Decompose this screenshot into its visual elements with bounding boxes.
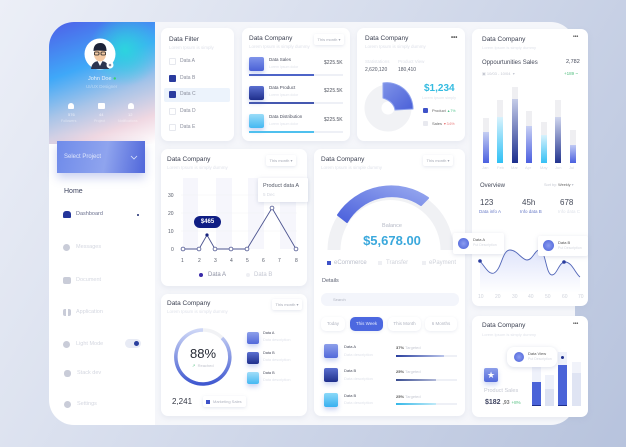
pie chart: [364, 82, 414, 132]
month labels: Jul: [569, 165, 574, 170]
panel: data company list: Data Distribution: [269, 114, 302, 119]
callout: data A: Data A: [473, 237, 485, 242]
panel: line chart card: This month ▾: [270, 158, 292, 163]
panel: pie card: Sales ▼3.6%: [432, 121, 455, 126]
tab: this month: [388, 317, 421, 331]
line chart: 5: [246, 258, 249, 264]
panel: data company list: [242, 28, 350, 141]
nav: application icon: [63, 309, 71, 316]
panel: pie card: Product View: [398, 59, 424, 64]
line chart: 2: [198, 258, 201, 264]
panel: pie card: Lorem Ipsum simply: [422, 96, 456, 100]
panel: progress ring card: Data description: [263, 338, 290, 342]
panel: progress ring card: Data description: [263, 378, 290, 382]
tab: today: Today: [327, 321, 339, 326]
panel: progress ring card: Data A: [263, 331, 274, 335]
panel: balance and details: Transfer: [386, 260, 408, 266]
stat values: [68, 112, 132, 117]
line chart: 6: [262, 258, 265, 264]
panel: data filter: Data D: [180, 108, 196, 114]
icon: star: ★: [487, 370, 495, 380]
search: Search: [333, 297, 346, 302]
callout: product data: 5 Dec: [263, 192, 275, 197]
role: UI/UX Designer: [86, 84, 117, 89]
month labels: Feb: [497, 165, 504, 170]
panel: balance and details: This month ▾: [427, 158, 449, 163]
panel: opportunities and overview: Lorem Ipsum is simply dummy: [482, 45, 536, 50]
panel: pie card: 180,410: [398, 67, 416, 73]
tab: this month: This Month: [393, 321, 416, 326]
panel: balance and details: 25% Targeted: [396, 369, 421, 374]
panel: line chart card: Lorem Ipsum is simply dummy: [167, 165, 228, 170]
panel: product sales: $182 ,93 +8%: [485, 399, 521, 406]
panel: opportunities and overview: 2,782: [566, 59, 580, 65]
month labels: Jan: [482, 165, 488, 170]
panel: data filter: Data A: [180, 58, 195, 64]
panel: opportunities and overview: •••: [573, 34, 578, 40]
line chart: 8: [295, 258, 298, 264]
stat: person icon: [68, 103, 74, 109]
panel: opportunities and overview: 45h: [522, 198, 535, 207]
nav: messages label: Messages: [76, 244, 101, 250]
month labels: Jun: [555, 165, 561, 170]
axis labels: 60: [562, 294, 568, 300]
panel: opportunities and overview: 678: [560, 198, 573, 207]
panel: balance and details: Details: [322, 278, 339, 284]
reached label: ↗ Reached: [192, 363, 214, 368]
axis labels: 50: [545, 294, 551, 300]
data rows: [324, 344, 338, 358]
panel: pie card: [357, 28, 465, 141]
nav: application label: Application: [76, 309, 103, 315]
tab: this week: [350, 317, 383, 331]
badge: Marketing Sales: [213, 398, 242, 404]
nav: light mode label: Light Mode: [76, 341, 103, 347]
panel: balance and details: 37% Targeted: [396, 345, 421, 350]
legend: data A: [199, 273, 203, 277]
icon: star: [484, 368, 498, 382]
panel: product sales: Lorem Ipsum is simply dummy: [482, 332, 536, 337]
stat: inbox icon: [98, 103, 105, 109]
line chart: 20: [168, 211, 174, 217]
panel: data company list: Lorem Ipsum dolor: [269, 93, 298, 97]
nav: stack dev label: Stack dev: [77, 370, 101, 376]
nav: messages icon: [63, 244, 70, 251]
ring value: 88%: [190, 346, 216, 361]
tab: 6 months: 6 Months: [432, 321, 450, 326]
panel: opportunities and overview: [472, 29, 588, 306]
panel: pie card: Lorem Ipsum is simply dummy: [365, 44, 426, 49]
panel: balance and details: eCommerce: [334, 260, 367, 266]
axis labels: 20: [495, 294, 501, 300]
panel: product sales: •••: [573, 321, 578, 327]
ring chart: [174, 328, 232, 386]
profile: [61, 38, 138, 123]
nav: settings icon: [64, 401, 71, 408]
panel: data filter: Data C: [180, 91, 196, 97]
month labels: Mar: [511, 165, 518, 170]
panel: opportunities and overview: Oppourtunities Sales: [482, 60, 538, 66]
callout: product data: [258, 178, 308, 202]
line chart: [168, 178, 298, 264]
stat values: 44: [99, 112, 103, 117]
tab: today: [321, 317, 345, 331]
panel: opportunities and overview: Info data C: [558, 209, 580, 214]
panel: balance and details: Data Company: [321, 156, 364, 163]
panel: data filter: Data E: [180, 124, 195, 130]
callout: data A: Put Description: [473, 243, 497, 247]
panel: product sales: Data Company: [482, 322, 525, 329]
month labels: May: [540, 165, 548, 170]
bars: [532, 367, 540, 406]
active dot: [137, 214, 139, 216]
stat labels: [61, 119, 138, 123]
panel: data filter: [161, 28, 234, 141]
line chart: 3: [214, 258, 217, 264]
pie value: $1,234: [424, 83, 455, 94]
legend: data B: [246, 273, 250, 277]
axis labels: 30: [512, 294, 518, 300]
panel: pie card: •••: [451, 35, 457, 41]
month labels: Apr: [525, 165, 531, 170]
panel: opportunities and overview: Info data B: [520, 209, 542, 214]
axis labels: 70: [578, 294, 584, 300]
panel: product sales: Product Sales: [484, 388, 518, 394]
panel: data filter: Data Filter: [169, 36, 199, 43]
panel: balance and details: Data description: [344, 400, 373, 405]
tooltip value: [194, 216, 221, 228]
callout: product data: Product data A: [263, 183, 299, 189]
panel: pie card: Statistations: [365, 59, 390, 64]
callout: data B: Put Description: [558, 246, 582, 250]
balance label: Balance: [382, 223, 402, 229]
panel: product sales: [472, 316, 588, 417]
search: [321, 293, 459, 306]
panel: balance and details: 25% Targeted: [396, 394, 421, 399]
axis labels: 40: [528, 294, 534, 300]
panel: data company list: $225.5K: [324, 88, 343, 94]
panel: opportunities and overview: 123: [480, 198, 493, 207]
line chart: 10: [168, 229, 174, 235]
panel: data company list: Lorem Ipsum dolor: [269, 122, 298, 126]
panel: data filter: Lorem Ipsum is simply: [169, 45, 214, 50]
panel: progress ring card: Lorem Ipsum is simply dummy: [167, 309, 228, 314]
panel: balance and details: Data description: [344, 376, 373, 381]
panel: line chart card: Data Company: [167, 156, 210, 163]
line chart: 4: [230, 258, 233, 264]
badge: [203, 396, 246, 407]
panel: balance and details: ePayment: [429, 260, 456, 266]
line chart: 30: [168, 193, 174, 199]
stat: bell icon: [128, 103, 134, 109]
callout: data B: Data B: [558, 240, 570, 245]
callout: data B: [538, 236, 588, 256]
panel: pie card: 2,620,120: [365, 67, 387, 73]
callout: data A: [453, 233, 504, 254]
legend rows: [247, 332, 259, 344]
axis labels: [478, 294, 584, 300]
panel: progress ring card: [161, 294, 307, 416]
callout: data view: Data View: [528, 351, 546, 356]
gauge: [328, 185, 453, 250]
stat labels: Notifications: [118, 119, 138, 123]
callout: data view: [507, 347, 557, 367]
panel: opportunities and overview: Overview: [480, 183, 505, 189]
nav: dashboard label: Dashboard: [76, 211, 103, 217]
panel: balance and details: Data B: [344, 393, 356, 398]
toggle: [125, 339, 141, 348]
panel: opportunities and overview: Data Company: [482, 36, 525, 43]
panel: data company list: Data Sales: [269, 57, 291, 62]
stat values: 12: [128, 112, 132, 117]
panel: data company list: This month ▾: [318, 37, 340, 42]
panel: progress ring card: Data B: [263, 351, 275, 355]
select project button: [57, 141, 145, 173]
tab: this week: This Week: [356, 321, 377, 326]
nav: dashboard icon: [63, 211, 71, 218]
panel: pie card: Product ▲7%: [432, 108, 455, 113]
axis labels: 10: [478, 294, 484, 300]
panel: progress ring card: Data description: [263, 358, 290, 362]
bar chart: [483, 87, 576, 163]
line chart: 0: [171, 247, 174, 253]
name: John Doe ●: [88, 76, 116, 82]
select project button: Select Project: [64, 154, 101, 160]
month labels: [482, 165, 574, 170]
panel: balance and details: [314, 149, 465, 416]
nav: stack dev icon: [64, 370, 71, 377]
panel: balance and details: Data description: [344, 352, 373, 357]
line chart: 1: [181, 258, 184, 264]
panel: balance and details: Data B: [344, 368, 356, 373]
balance value: $5,678.00: [363, 233, 421, 248]
panel: opportunities and overview: ▣ 10/03 - 10/04 ▾: [482, 71, 515, 76]
panel: line chart card: Data A: [208, 272, 226, 278]
stat labels: Project: [94, 119, 105, 123]
panel: progress ring card: Data B: [263, 371, 275, 375]
tab: 6 months: [425, 317, 457, 331]
panel: data filter: Data B: [180, 75, 195, 81]
nav: light mode icon: [63, 341, 70, 348]
line chart: [478, 250, 580, 282]
panel: progress ring card: Data Company: [167, 300, 210, 307]
sidebar: [49, 22, 155, 425]
nav heading: Home: [64, 188, 83, 195]
callout: data view: Put Description: [528, 357, 552, 361]
panel: balance and details: Data A: [344, 344, 356, 349]
panel: data company list: Lorem Ipsum dolor: [269, 65, 298, 69]
stat labels: Followers: [61, 119, 76, 123]
panel: progress ring card: 2,241: [172, 397, 192, 406]
line chart: 7: [278, 258, 281, 264]
panel: line chart card: [161, 149, 307, 286]
panel: pie card: Data Company: [365, 35, 408, 42]
icon: avatar: [84, 38, 116, 70]
main panel background: [120, 22, 575, 425]
panel: data company list: Lorem Ipsum is simply dummy: [249, 44, 310, 49]
panel: data company list: Data Company: [249, 35, 292, 42]
panel: data company list: $225.5K: [324, 117, 343, 123]
panel: progress ring card: This month ▾: [276, 302, 298, 307]
panel: opportunities and overview: +189 ~: [564, 71, 578, 76]
stat values: 576: [68, 112, 75, 117]
panel: data company list: $225.5K: [324, 60, 343, 66]
gauge legend: [327, 261, 331, 265]
tooltip value: $465: [201, 219, 214, 225]
panel: opportunities and overview: Sort by: Weekly ▾: [544, 183, 574, 187]
panel: line chart card: Data B: [254, 272, 272, 278]
nav: settings label: Settings: [77, 401, 97, 407]
nav: document icon: [63, 277, 71, 284]
nav: document label: Document: [76, 277, 101, 283]
panel: data company list: Data Product: [269, 85, 295, 90]
panel: balance and details: Lorem Ipsum is simple dummy: [321, 165, 382, 170]
panel: opportunities and overview: Data info A: [479, 209, 501, 214]
